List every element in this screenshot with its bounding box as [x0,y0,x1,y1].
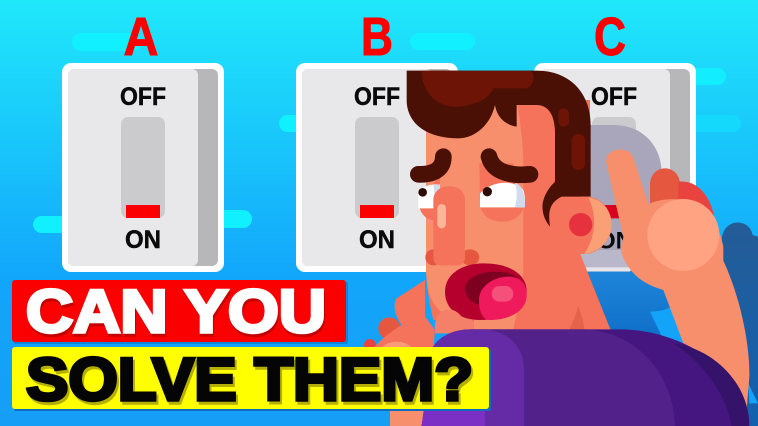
switch C: OFF [591,83,637,111]
left eye [418,184,440,208]
chest notch [569,305,584,330]
nostrils [425,249,479,265]
dark blue backdrop shapes [580,222,758,426]
right eye [480,183,525,207]
nose [433,186,465,265]
mouth [445,263,527,320]
letter C: C [594,7,626,67]
banner: solve them: SOLVE THEM? [26,346,473,413]
ear [553,197,612,254]
eyebrows [418,157,530,175]
letter B: B [361,7,393,67]
switch C [534,63,696,272]
raised hand [606,150,749,410]
nose highlight [437,204,446,228]
banner: solve them: SOLVE THEM? [28,349,475,416]
background clouds [33,33,741,233]
switch A: ON [125,226,161,254]
banner: can you: CAN YOU [27,281,327,348]
hand shadow on switch C: ON [597,227,633,254]
switch B: ON [359,226,395,254]
switch A [62,63,224,272]
neck [470,243,611,330]
purple shirt [422,329,749,426]
head [426,100,590,329]
switch B [296,63,458,272]
switch B: OFF [354,83,400,111]
hand shadow on switch C [580,125,662,272]
letter A: A [124,7,158,67]
character [364,71,758,426]
banner: can you: CAN YOU [26,278,326,345]
eye sockets [419,163,523,222]
left hand [364,280,474,426]
hair [407,71,591,227]
switch A: OFF [120,83,166,111]
